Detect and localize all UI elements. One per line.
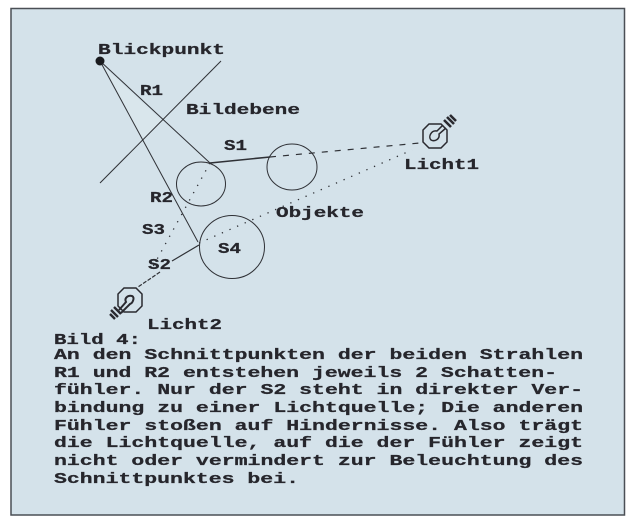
label: S4: S4 <box>218 241 241 258</box>
label: R2: R2 <box>150 190 173 207</box>
icon: bulb Licht2 <box>110 288 142 319</box>
shadow feeler S1 dashed <box>270 143 420 157</box>
label: Licht1: Licht1 <box>404 157 479 174</box>
caption text block: die Lichtquelle, auf die der Fühler zeigt <box>54 435 583 452</box>
caption text block: fühler. Nur der S2 steht in direkter Ver- <box>54 382 583 399</box>
ray R2 <box>100 61 198 242</box>
label: Licht2: Licht2 <box>147 317 222 334</box>
shadow feeler S2 lower <box>138 272 160 287</box>
label: Objekte: Objekte <box>276 205 364 222</box>
caption text block <box>54 332 583 488</box>
icon: viewpoint dot <box>96 56 104 66</box>
diagram: rays and objects <box>100 61 420 287</box>
caption text block: An den Schnittpunkten der beiden Strahlen <box>54 347 583 364</box>
label: R1: R1 <box>140 83 163 100</box>
label: S1: S1 <box>224 138 247 155</box>
caption text block: bindung zu einer Lichtquelle; Die anderen <box>54 400 583 417</box>
image plane line <box>100 61 221 183</box>
caption text block: nicht oder vermindert zur Beleuchtung des <box>54 453 583 470</box>
label: Blickpunkt: Blickpunkt <box>98 42 225 59</box>
label: S3: S3 <box>142 222 165 239</box>
caption text block: Fühler stoßen auf Hindernisse. Also trägt <box>54 418 583 435</box>
ray R1 <box>100 61 210 163</box>
caption heading: Bild 4: <box>54 332 141 349</box>
label: Bildebene: Bildebene <box>186 102 300 119</box>
object circle left <box>176 162 226 206</box>
label: S2: S2 <box>148 257 171 274</box>
object circle S4 <box>200 216 264 278</box>
shaded area between rays <box>103 66 162 139</box>
shadow feeler S2 <box>172 245 199 261</box>
caption text block: Schnittpunktes bei. <box>54 471 299 488</box>
shadow feeler S3 dotted <box>150 163 210 272</box>
shadow feeler S4 dotted <box>199 150 412 243</box>
object circle middle <box>267 144 317 190</box>
shadow feeler S1 solid <box>210 157 270 163</box>
caption text block: R1 und R2 entstehen jeweils 2 Schatten- <box>54 365 557 382</box>
icon: bulb Licht1 <box>423 115 456 148</box>
